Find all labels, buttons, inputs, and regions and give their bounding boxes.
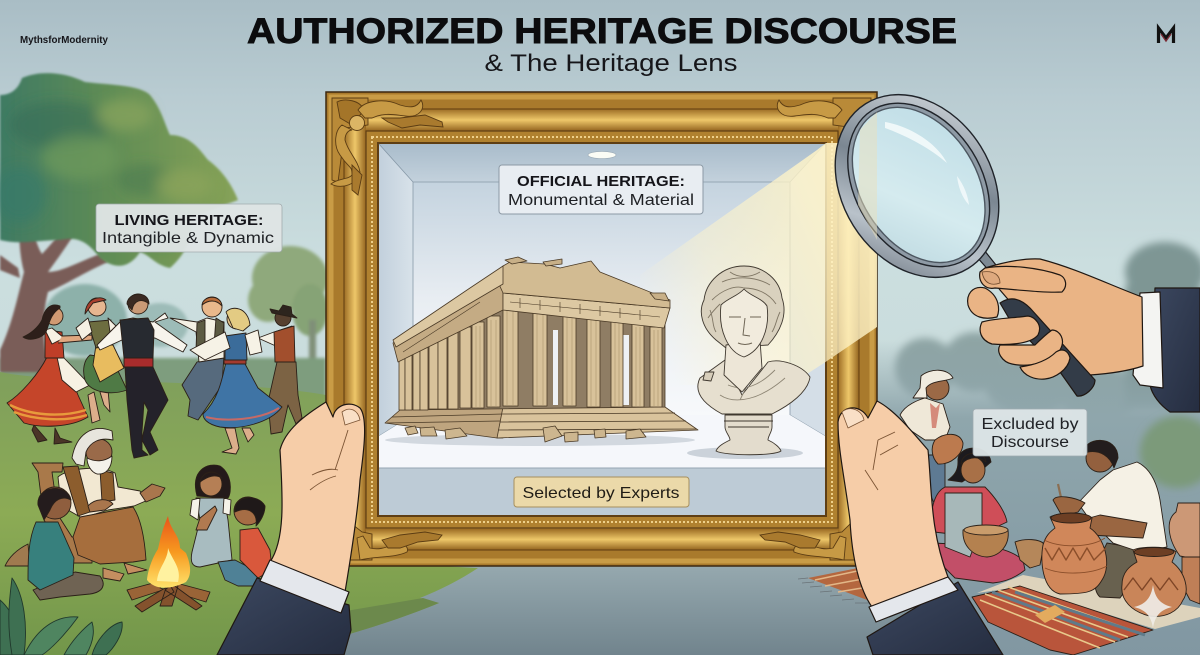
label: selected by experts xyxy=(514,477,689,507)
distant tree line right xyxy=(895,242,1200,423)
magnifier rim and lens xyxy=(802,64,1032,308)
label: official heritage: OFFICIAL HERITAGE: xyxy=(517,173,685,190)
plinth floor xyxy=(379,415,825,468)
right hand holding frame xyxy=(838,401,1003,655)
dancer: woman in blue skirt xyxy=(190,308,282,454)
magnifier palm xyxy=(985,259,1143,375)
brand name: MythsforModernity xyxy=(20,34,108,46)
subtitle: & The Heritage Lens xyxy=(484,50,738,77)
label: selected by experts: Selected by Experts xyxy=(522,485,680,502)
middle finger xyxy=(980,316,1040,344)
label: official heritage: Monumental & Material xyxy=(508,192,694,209)
frame convex moulding xyxy=(344,109,859,131)
seated man potter xyxy=(1053,440,1167,598)
cream mat xyxy=(977,575,1200,629)
bottom right xyxy=(830,520,871,560)
ground under frame xyxy=(300,560,920,655)
frame seen through lens xyxy=(858,112,877,240)
left palm and thumb xyxy=(270,402,365,592)
Parthenon temple xyxy=(385,257,698,446)
ceiling xyxy=(379,144,825,182)
right suit sleeve xyxy=(867,582,1003,655)
elder robe xyxy=(58,468,148,518)
foreground plant xyxy=(0,578,122,655)
seated woman potter xyxy=(930,448,1025,583)
large decorated pot xyxy=(1042,513,1107,594)
bottom left xyxy=(332,520,372,560)
neck xyxy=(724,340,762,392)
temple columns xyxy=(399,305,662,410)
label: living heritage: LIVING HERITAGE: xyxy=(114,212,264,229)
brand logo xyxy=(1158,28,1174,43)
floor shadow xyxy=(385,434,695,446)
little finger xyxy=(1020,350,1070,379)
dancer: man in black vest xyxy=(97,294,187,458)
magnifier grip xyxy=(1000,299,1095,396)
artisans group xyxy=(798,370,1200,655)
ring finger xyxy=(999,330,1062,365)
standing woman with pot xyxy=(900,370,963,505)
bush right xyxy=(1140,416,1200,488)
ceiling light xyxy=(588,151,616,159)
campfire xyxy=(127,516,210,612)
pedestal xyxy=(716,415,781,455)
large tree xyxy=(0,73,238,372)
distant trees left xyxy=(0,246,328,398)
right shirt cuff xyxy=(869,577,958,622)
living heritage: storyteller group xyxy=(0,429,272,655)
face xyxy=(720,289,768,357)
right palm and thumb xyxy=(838,401,948,607)
dancer: woman in red skirt xyxy=(7,305,92,444)
light beam from lens xyxy=(640,143,877,385)
front decorated pot xyxy=(1122,547,1186,616)
dancer: man in olive vest xyxy=(170,297,224,420)
woven rug left part xyxy=(798,568,880,603)
ornate gold frame xyxy=(326,92,877,566)
temple entablature xyxy=(393,257,670,362)
boy in teal shirt xyxy=(28,487,103,600)
elder head xyxy=(86,439,112,465)
upper shirt cuff xyxy=(1133,292,1163,388)
grass shadow xyxy=(340,598,439,635)
left hand holding frame xyxy=(217,402,365,655)
living heritage: dancers xyxy=(7,294,302,458)
sparkle watermark xyxy=(1134,585,1172,628)
thumb xyxy=(980,266,1066,292)
elder lap cloth xyxy=(73,507,146,564)
storyteller elder xyxy=(5,429,165,581)
label: living heritage: Intangible & Dynamic xyxy=(102,230,274,247)
hair xyxy=(701,266,784,348)
right backdrop ground xyxy=(877,340,1200,655)
front band xyxy=(379,468,825,515)
frame moulding lines xyxy=(344,109,859,550)
side walls xyxy=(379,144,413,440)
top right xyxy=(833,98,871,140)
left shirt cuff xyxy=(260,560,349,613)
dancer: hat man xyxy=(258,305,302,434)
title: AUTHORIZED HERITAGE DISCOURSE xyxy=(247,12,957,51)
small bowl xyxy=(1015,540,1044,568)
bust shadow xyxy=(687,447,803,459)
corner scrolls xyxy=(331,98,871,560)
back wall xyxy=(413,182,790,415)
temple rubble xyxy=(405,426,646,442)
upper sleeve xyxy=(1150,288,1200,412)
shoulders xyxy=(698,360,810,414)
lens highlights xyxy=(885,122,947,163)
label: excluded by discourse: Discourse xyxy=(991,434,1069,451)
label: excluded by discourse xyxy=(973,409,1087,456)
dancer: woman in green skirt xyxy=(76,298,127,423)
far terracotta pots xyxy=(1169,503,1200,604)
temple steps xyxy=(385,407,698,438)
left suit sleeve xyxy=(217,578,351,655)
museum display room xyxy=(379,144,825,515)
temple interior xyxy=(400,300,665,410)
firewood pile xyxy=(5,544,30,566)
magnifier stem xyxy=(976,250,1000,274)
grass meadow xyxy=(0,372,478,655)
label: living heritage xyxy=(96,204,282,252)
right hand holding magnifier xyxy=(968,259,1200,412)
top left xyxy=(332,98,368,182)
label: official heritage xyxy=(499,165,703,214)
label: excluded by discourse: Excluded by xyxy=(982,416,1079,433)
index finger xyxy=(968,287,999,318)
woven rug xyxy=(972,586,1153,655)
girl xyxy=(190,465,232,567)
frame bead band xyxy=(372,137,832,522)
marble bust xyxy=(687,266,810,459)
boy in orange shirt xyxy=(218,497,272,586)
wooden chair xyxy=(32,463,92,563)
magnifying glass xyxy=(802,64,1032,308)
